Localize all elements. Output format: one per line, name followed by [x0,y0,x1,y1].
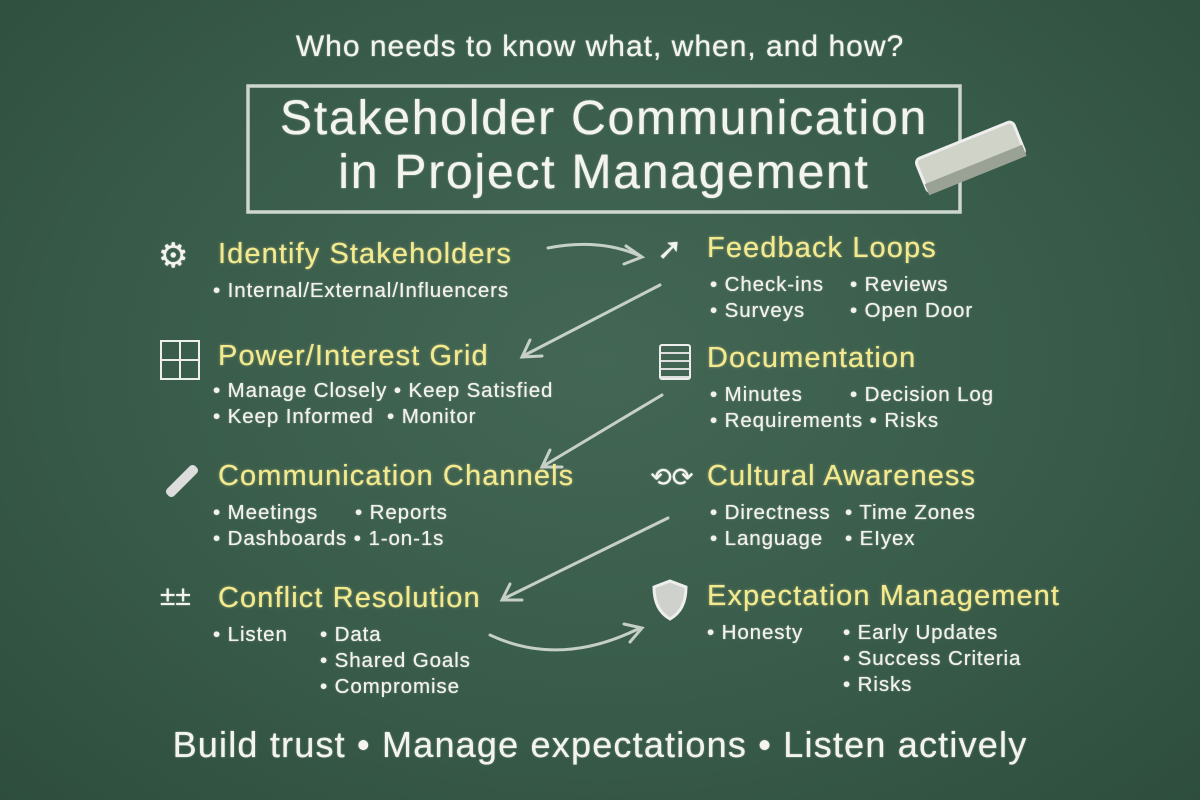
footer tagline: Build trust • Manage expectations • Listen actively [173,724,1027,765]
section: feedback loops [657,232,973,322]
eraser [915,121,1027,195]
section: feedback loops: • Check-ins [710,273,824,296]
section: power interest grid: Power/Interest Grid [218,340,489,372]
icon: arrow: ➚ [657,233,682,266]
section: feedback loops: • Surveys [710,299,805,322]
section: feedback loops: • Reviews [850,273,948,296]
section: documentation: • Decision Log [850,383,994,406]
icon: shield [652,579,688,621]
section: cultural awareness: • Directness [710,501,831,524]
section: documentation: Documentation [707,342,916,374]
section: power interest grid: • Manage Closely • Keep Satisfied [213,379,553,402]
section: identify stakeholders: Identify Stakeholders [218,238,512,270]
section: cultural awareness [650,460,976,550]
section: power interest grid [160,340,553,428]
icon: gear: ⚙ [158,237,188,275]
section: expectation management: • Success Criteria [843,647,1021,670]
section: documentation: • Requirements • Risks [710,409,939,432]
section: cultural awareness: • Language [710,527,823,550]
section: identify stakeholders: • Internal/External/Influencers [213,279,509,302]
section: feedback loops: Feedback Loops [707,232,937,264]
section: conflict resolution: • Compromise [320,675,460,698]
subtitle question: Who needs to know what, when, and how? [296,30,904,63]
section: cultural awareness: • Time Zones [845,501,976,524]
section: conflict resolution: • Listen [213,623,288,646]
section: cultural awareness: • EIyex [845,527,915,550]
section: communication channels: • Dashboards • 1-on-1s [213,527,444,550]
icon: grid [160,340,200,380]
section: power interest grid: • Keep Informed • Monitor [213,405,476,428]
section: documentation: • Minutes [710,383,803,406]
section: identify stakeholders [158,237,512,302]
title: in Project Management [338,146,870,199]
icon: cycle: ⟲⟳ [650,462,694,492]
section: conflict resolution: • Data [320,623,382,646]
section: expectation management: • Honesty [707,621,803,644]
section: conflict resolution: Conflict Resolution [218,582,481,614]
section: expectation management: • Risks [843,673,912,696]
section: documentation [659,342,994,432]
icon: notepad [659,344,691,380]
section: communication channels: • Meetings [213,501,318,524]
icon: balance: ±± [160,580,191,611]
title: Stakeholder Communication [280,92,928,145]
section: communication channels [166,460,574,550]
section: communication channels: Communication Channels [218,460,574,492]
section: expectation management [652,579,1060,696]
title [280,92,928,199]
section: conflict resolution [160,580,481,698]
section: expectation management: Expectation Management [707,580,1060,612]
section: conflict resolution: • Shared Goals [320,649,471,672]
section: feedback loops: • Open Door [850,299,973,322]
icon: chalk [164,463,200,499]
section: communication channels: • Reports [355,501,448,524]
section: expectation management: • Early Updates [843,621,998,644]
section: cultural awareness: Cultural Awareness [707,460,976,492]
